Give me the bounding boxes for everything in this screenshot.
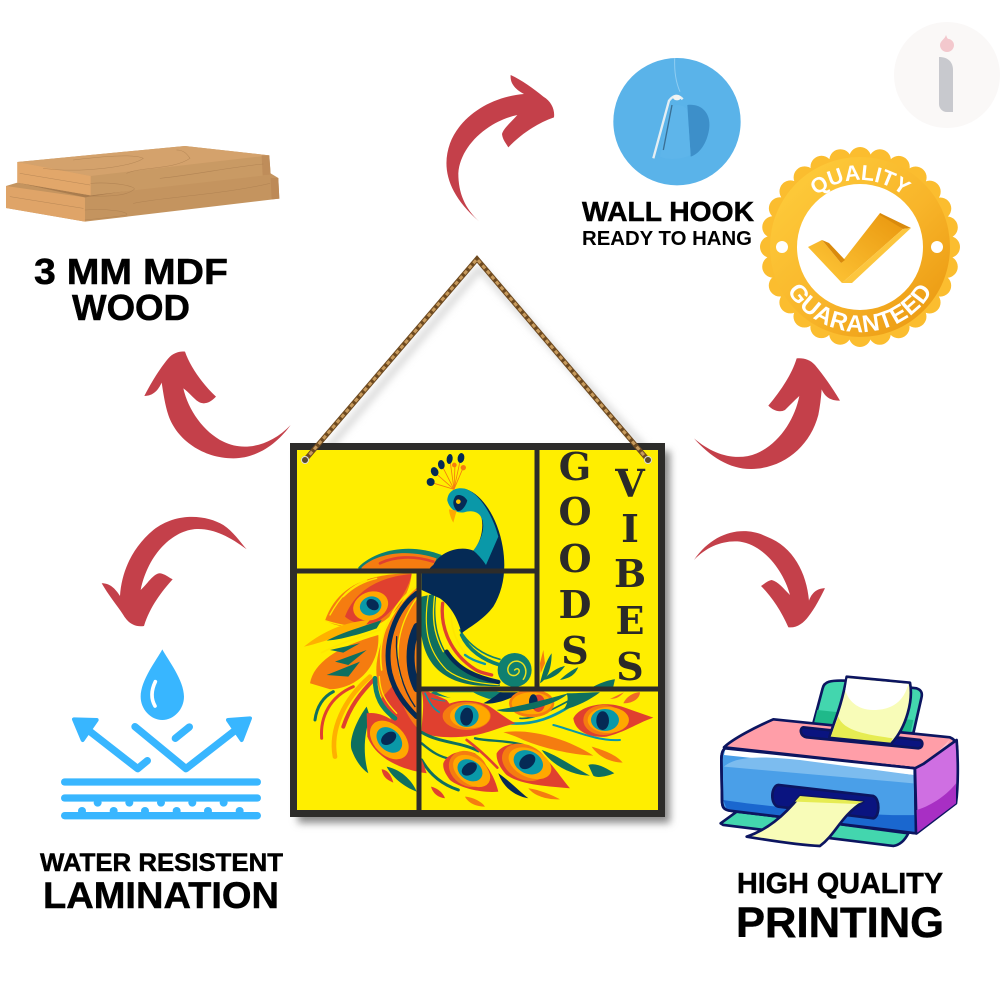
right leaves [540, 653, 552, 683]
word: goods: D [559, 582, 591, 627]
word: vibes: V [614, 461, 646, 506]
arrow: to mdf wood [144, 352, 291, 458]
eye feather: lower left [442, 743, 498, 794]
word: vibes: E [616, 598, 644, 643]
word: vibes: B [614, 551, 646, 596]
icon: wall hook [613, 58, 741, 185]
badge text: quality: QUALITY [811, 165, 912, 194]
label: water resistent lamination: WATER RESISTENT [40, 849, 283, 877]
eye feather: small top [497, 689, 568, 717]
label: water resistent lamination [40, 849, 283, 916]
left feather cluster [325, 573, 412, 628]
label: high quality printing: PRINTING [736, 899, 944, 947]
arrow: to quality badge [694, 358, 840, 469]
label: wall hook: WALL HOOK [582, 196, 754, 227]
logo watermark [894, 22, 1000, 128]
label: high quality printing: HIGH QUALITY [737, 868, 943, 900]
label: water resistent lamination: LAMINATION [43, 875, 279, 916]
central tail streams [376, 585, 420, 763]
hanging rope [305, 259, 648, 460]
badge check mark [808, 213, 911, 283]
stream to spiral [420, 593, 532, 687]
stream ribbons [430, 692, 520, 699]
badge text: guaranteed: GUARANTEED [790, 284, 930, 332]
eye feather: left [440, 701, 516, 737]
eye feather: lower centre [496, 736, 570, 788]
peacock body [422, 489, 504, 633]
word: goods [558, 444, 592, 673]
arrow: to lamination [102, 517, 247, 626]
peacock crest [427, 452, 466, 489]
word: goods: O [558, 536, 592, 581]
label: 3 mm mdf wood: WOOD [72, 287, 190, 328]
eye feather: right [573, 704, 653, 737]
panel: peacock sign [290, 443, 665, 817]
label: 3 mm mdf wood [34, 251, 228, 328]
rope holes [302, 456, 652, 464]
panel shadow [298, 451, 670, 823]
label: high quality printing [736, 868, 944, 947]
eye feather: bottom left [362, 713, 427, 773]
word: goods: O [558, 489, 592, 534]
label: 3 mm mdf wood: 3 MM MDF [34, 251, 228, 292]
arrow: to printing [694, 531, 825, 627]
lower tail panel art [422, 689, 653, 807]
peacock neck and head [447, 488, 498, 565]
icon: wood planks [6, 146, 279, 222]
eye feather: upper left [349, 586, 393, 626]
rope shadow [320, 268, 664, 470]
icon: printer [721, 677, 958, 846]
word: vibes: I [621, 506, 639, 551]
icon: quality guaranteed badge [760, 147, 960, 347]
label: wall hook: READY TO HANG [582, 228, 752, 250]
label: wall hook [582, 196, 754, 250]
word: vibes [614, 461, 646, 689]
word: goods: G [559, 444, 591, 489]
arrow: to wall hook [446, 75, 554, 222]
panel dividers and frame [293, 446, 662, 814]
upper tail arc [358, 549, 442, 573]
peacock artwork [304, 452, 653, 807]
tail spiral [498, 653, 532, 687]
word: goods: S [561, 628, 589, 673]
word: vibes: S [616, 644, 644, 689]
icon: water resistant layers [65, 649, 257, 816]
